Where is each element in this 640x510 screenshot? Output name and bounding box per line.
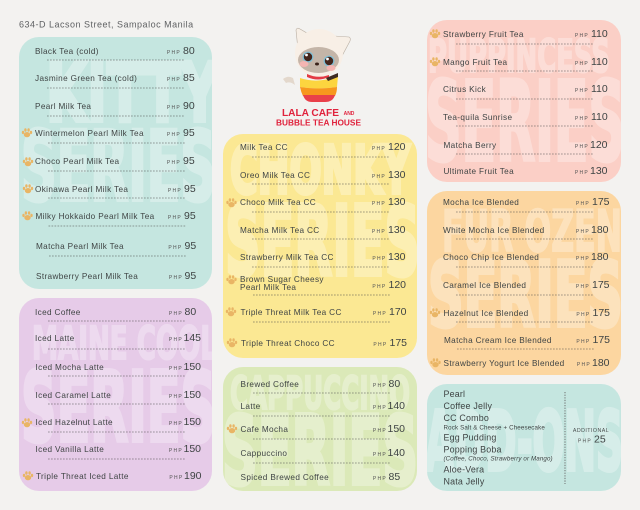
panel: Add-ons [425, 384, 623, 491]
item: Iced Mocha Latte [36, 361, 201, 376]
panel: Cappuccino Series [223, 367, 417, 491]
item: Milky Hokkaido Pearl Milk Tea: PHP [168, 215, 182, 221]
watermark: Kitty Series [24, 60, 212, 204]
logo wordmark: LALA CAFE [282, 108, 339, 119]
item: Wintermelon Pearl Milk Tea [22, 127, 195, 143]
item: Okinawa Pearl Milk Tea [23, 183, 196, 198]
item: Triple Threat Choco CC: Triple Threat Choco CC [241, 339, 335, 348]
item: Matcha Milk Tea CC: Matcha Milk Tea CC [240, 226, 320, 235]
item: Black Tea: Black Tea (cold) [35, 47, 99, 56]
item: Triple Threat Milk Tea CC [226, 306, 407, 322]
item: Tea-quila Sunrise: PHP [575, 116, 589, 122]
item: Milk Tea CC: 120 [388, 141, 406, 153]
icon: cat arm [283, 77, 295, 85]
item: Hazelnut Ice Blended: PHP [576, 312, 590, 318]
logo wordmark: BUBBLE TEA HOUSE [276, 118, 361, 128]
item: Matcha Cream Ice Blended: PHP [576, 339, 590, 345]
item: Iced Latte: PHP [169, 337, 183, 343]
add-ons list: Pearl [444, 389, 465, 399]
item: Triple Threat Milk Tea CC: Triple Threat Milk Tea CC [240, 308, 342, 317]
watermark: Kitty Series: SERIES [21, 111, 216, 223]
item: Spiced Brewed Coffee: Spiced Brewed Coffee [240, 473, 329, 482]
item: Triple Threat Milk Tea CC: 170 [389, 306, 407, 318]
item: Mocha Ice Blended: 175 [592, 196, 610, 208]
logo wordmark [276, 108, 361, 128]
item: Matcha Milk Tea CC: PHP [372, 229, 386, 235]
item: Strawberry Milk Tea CC: PHP [372, 256, 386, 262]
item: White Mocha Ice Blended: White Mocha Ice Blended [443, 226, 545, 235]
item: Iced Mocha Latte: Iced Mocha Latte [36, 363, 104, 372]
item: Choco Chip Ice Blended: Choco Chip Ice Blended [443, 253, 539, 262]
item: Pearl Milk Tea: PHP [167, 105, 181, 111]
watermark: Cappuccino Series: SERIES [222, 397, 418, 507]
item: Triple Threat Choco CC: 175 [390, 337, 407, 349]
additional price [573, 428, 609, 446]
item: Milky Hokkaido Pearl Milk Tea: Milky Hokkaido Pearl Milk Tea [36, 212, 155, 221]
item: Ultimate Fruit Tea: Ultimate Fruit Tea [444, 167, 514, 176]
additional price: ADDITIONAL [573, 428, 609, 434]
item: Triple Threat Iced Latte: PHP [169, 475, 184, 481]
item: Latte [240, 400, 405, 416]
item: Spiced Brewed Coffee: 85 [388, 471, 400, 483]
item: Black Tea [35, 45, 195, 60]
item: Iced Caramel Latte: Iced Caramel Latte [36, 391, 111, 400]
additional price: PHP [578, 438, 592, 444]
item: Iced Coffee: Iced Coffee [35, 308, 81, 317]
item: Iced Caramel Latte: PHP [169, 394, 183, 400]
item: Cafe Mocha: Cafe Mocha [240, 425, 288, 434]
item: Spiced Brewed Coffee: PHP [373, 476, 387, 482]
item: Milky Hokkaido Pearl Milk Tea: 95 [184, 210, 196, 222]
item: Oreo Milk Tea CC: 130 [388, 169, 406, 181]
item: Choco Milk Tea CC: Choco Milk Tea CC [240, 198, 316, 207]
item: Matcha Berry: 120 [590, 139, 608, 151]
item: Wintermelon Pearl Milk Tea: Wintermelon Pearl Milk Tea [35, 129, 144, 138]
item: Brewed Coffee [240, 378, 400, 393]
item: Iced Coffee: 80 [184, 306, 196, 318]
item: Ultimate Fruit Tea: PHP [575, 170, 589, 176]
item: Iced Hazelnut Latte [22, 416, 201, 432]
add-ons list: Rock Salt & Cheese + Cheesecake [444, 424, 545, 432]
item: Matcha Berry [444, 139, 608, 154]
item: Matcha Milk Tea CC: 130 [388, 224, 406, 236]
item: Iced Caramel Latte [36, 389, 201, 404]
watermark: Cappuccino Series: CAPPUCCINO [230, 367, 410, 420]
item: Hazelnut Ice Blended [430, 307, 610, 322]
item: White Mocha Ice Blended: PHP [576, 229, 590, 235]
item: Wintermelon Pearl Milk Tea: PHP [167, 132, 181, 138]
watermark: Chonky Series: CHONKY [230, 132, 411, 209]
item: Triple Threat Iced Latte [23, 470, 202, 482]
add-ons list: Aloe-Vera [444, 464, 484, 474]
item: Mocha Ice Blended: Mocha Ice Blended [443, 198, 519, 207]
item: Cappuccino [240, 447, 405, 463]
item: Choco Milk Tea CC: PHP [372, 201, 386, 207]
item: Cafe Mocha [227, 423, 405, 439]
item: Matcha Pearl Milk Tea: PHP [168, 245, 182, 251]
item: Brown Sugar Cheesy Pearl Milk Tea: 120 [388, 279, 406, 291]
item: Milk Tea CC: PHP [372, 146, 386, 152]
add-ons list: Nata Jelly [444, 476, 485, 486]
item: Iced Caramel Latte: 150 [184, 389, 201, 401]
item: Latte: Latte [240, 402, 261, 411]
item: Matcha Cream Ice Blended: Matcha Cream Ice Blended [444, 336, 552, 345]
item: Cappuccino: Cappuccino [240, 449, 287, 458]
logo: Lala Cafe cat mascot [276, 28, 361, 128]
item: Strawberry Pearl Milk Tea: 95 [184, 270, 196, 282]
watermark: Chonky Series: SERIES [225, 185, 420, 298]
item: Triple Threat Iced Latte: 190 [184, 470, 202, 482]
item: Matcha Milk Tea CC [240, 224, 406, 239]
item: Caramel Ice Blended [443, 279, 610, 295]
item: Caramel Ice Blended: 175 [592, 279, 610, 291]
item: Oreo Milk Tea CC [240, 169, 406, 184]
item: Matcha Pearl Milk Tea: Matcha Pearl Milk Tea [36, 242, 124, 251]
item: Cafe Mocha: PHP [373, 428, 387, 434]
item: Mango Fruit Tea: Mango Fruit Tea [443, 58, 507, 67]
item: Choco Pearl Milk Tea: Choco Pearl Milk Tea [35, 157, 119, 166]
item: Iced Latte: Iced Latte [35, 334, 75, 343]
item: Strawberry Pearl Milk Tea [36, 270, 196, 282]
panel: Kitty Series [19, 37, 220, 289]
panel: Fur-ozen Series [427, 191, 623, 375]
watermark: Maine Cool Series: MAINE COOL [32, 317, 217, 370]
divider [564, 392, 566, 484]
panel: Maine Cool Series [19, 298, 217, 491]
item: Cappuccino: 140 [388, 447, 405, 459]
item: Citrus Kick: 110 [591, 83, 608, 95]
item: Caramel Ice Blended: PHP [576, 284, 590, 290]
item: Brown Sugar Cheesy Pearl Milk Tea: Brown Sugar Cheesy [240, 275, 324, 284]
item: Iced Vanilla Latte: PHP [169, 448, 183, 454]
item: Mango Fruit Tea: PHP [575, 61, 589, 67]
watermark: Kitty Series: KITTY [46, 47, 220, 141]
item: Hazelnut Ice Blended: 175 [592, 307, 610, 319]
watermark: Maine Cool Series: SERIES [21, 351, 216, 464]
item: Brown Sugar Cheesy Pearl Milk Tea: PHP [372, 284, 386, 290]
add-ons list: Coffee Jelly [444, 401, 492, 411]
icon: bubble tea cup [300, 73, 338, 102]
item: Citrus Kick: Citrus Kick [443, 85, 487, 94]
item: Triple Threat Choco CC [227, 337, 407, 349]
item: Brewed Coffee: PHP [373, 383, 387, 389]
item: Spiced Brewed Coffee [240, 471, 400, 483]
item: Okinawa Pearl Milk Tea: 95 [184, 183, 196, 195]
item: Iced Latte [35, 332, 201, 349]
additional price: 25 [594, 434, 606, 446]
item: Iced Vanilla Latte [36, 443, 201, 459]
item: Brewed Coffee: 80 [388, 378, 400, 390]
item: Iced Vanilla Latte: 150 [184, 443, 201, 455]
item: Cafe Mocha: 150 [388, 423, 405, 435]
logo wordmark: AND [344, 111, 355, 117]
add-ons list: (Coffee, Choco, Strawberry or Mango) [444, 456, 553, 462]
item: Iced Mocha Latte: 150 [184, 361, 201, 373]
item: Strawberry Pearl Milk Tea: PHP [169, 275, 183, 281]
item: Brown Sugar Cheesy Pearl Milk Tea [226, 275, 406, 295]
item: Wintermelon Pearl Milk Tea: 95 [183, 127, 195, 139]
item: Brown Sugar Cheesy Pearl Milk Tea: Pearl Milk Tea [240, 283, 296, 292]
item: Matcha Berry: Matcha Berry [444, 141, 497, 150]
item: Iced Coffee: PHP [169, 311, 183, 317]
item: Oreo Milk Tea CC: Oreo Milk Tea CC [240, 171, 310, 180]
icon: cat head [295, 29, 343, 77]
item: Milk Tea CC [240, 141, 406, 157]
item: Strawberry Yogurt Ice Blended: PHP [577, 362, 591, 368]
item: Iced Latte: 145 [184, 332, 201, 344]
add-ons list: Popping Boba [444, 444, 502, 454]
watermark: Puppincess Series [428, 37, 621, 164]
item: Strawberry Milk Tea CC: 130 [388, 251, 406, 263]
item: Jasmine Green Tea [35, 72, 195, 88]
item: Iced Hazelnut Latte: Iced Hazelnut Latte [36, 418, 113, 427]
item: Strawberry Fruit Tea: 110 [591, 28, 608, 40]
item: Caramel Ice Blended: Caramel Ice Blended [443, 281, 526, 290]
item: Mango Fruit Tea: 110 [591, 56, 608, 68]
item: White Mocha Ice Blended [443, 224, 609, 239]
item: Jasmine Green Tea: 85 [183, 72, 195, 84]
item: Mocha Ice Blended [443, 196, 610, 212]
item: Choco Milk Tea CC: 130 [388, 196, 406, 208]
watermark: Cappuccino Series [224, 374, 416, 488]
item: Strawberry Milk Tea CC: Strawberry Milk Tea CC [240, 253, 334, 262]
item: Milk Tea CC: Milk Tea CC [240, 143, 288, 152]
item: White Mocha Ice Blended: 180 [591, 224, 609, 236]
item: Latte: PHP [373, 405, 387, 411]
item: Cappuccino: PHP [373, 452, 387, 458]
item: Hazelnut Ice Blended: Hazelnut Ice Blended [444, 309, 529, 318]
item: Strawberry Pearl Milk Tea: Strawberry Pearl Milk Tea [36, 272, 138, 281]
item: Choco Chip Ice Blended [443, 251, 609, 267]
add-ons list [444, 389, 553, 486]
item: Iced Coffee [35, 306, 196, 321]
item: Pearl Milk Tea [35, 100, 195, 116]
item: Tea-quila Sunrise: Tea-quila Sunrise [443, 113, 512, 122]
item: Black Tea: PHP [167, 50, 181, 56]
item: Ultimate Fruit Tea: 130 [590, 165, 608, 177]
item: Choco Pearl Milk Tea: 95 [183, 155, 195, 167]
item: Strawberry Fruit Tea [430, 28, 608, 44]
item: Choco Pearl Milk Tea [23, 155, 195, 171]
item: Latte: 140 [388, 400, 405, 412]
item: Jasmine Green Tea: Jasmine Green Tea (cold) [35, 74, 137, 83]
item: Strawberry Fruit Tea: Strawberry Fruit Tea [443, 30, 524, 39]
item: Strawberry Yogurt Ice Blended [430, 357, 610, 369]
address: 634-D Lacson Street, Sampaloc Manila [19, 20, 194, 30]
item: Oreo Milk Tea CC: PHP [372, 174, 386, 180]
item: Choco Milk Tea CC [226, 196, 406, 212]
watermark: Fur-ozen Series [430, 208, 620, 330]
item: Strawberry Fruit Tea: PHP [575, 33, 589, 39]
panel: Chonky Series [223, 132, 420, 358]
item: Matcha Pearl Milk Tea: 95 [184, 240, 196, 252]
add-ons list: Egg Pudding [444, 432, 497, 442]
icon: cat ears [296, 28, 350, 56]
item: Okinawa Pearl Milk Tea: PHP [168, 188, 182, 194]
item: Strawberry Yogurt Ice Blended: 180 [592, 357, 610, 369]
item: Okinawa Pearl Milk Tea: Okinawa Pearl Milk Tea [35, 185, 128, 194]
item: Iced Vanilla Latte: Iced Vanilla Latte [36, 445, 104, 454]
item: Iced Hazelnut Latte: PHP [169, 421, 183, 427]
item: Matcha Berry: PHP [575, 144, 589, 150]
item: Milky Hokkaido Pearl Milk Tea [22, 210, 196, 226]
add-ons list: CC Combo [444, 413, 489, 423]
item: Brewed Coffee: Brewed Coffee [240, 380, 299, 389]
item: Choco Chip Ice Blended: 180 [591, 251, 609, 263]
item: Ultimate Fruit Tea [444, 165, 608, 177]
item: Choco Chip Ice Blended: PHP [576, 256, 590, 262]
item: Mango Fruit Tea [430, 56, 608, 71]
item: Strawberry Milk Tea CC [240, 251, 406, 267]
item: Strawberry Yogurt Ice Blended: Strawberry Yogurt Ice Blended [444, 359, 565, 368]
item: Iced Mocha Latte: PHP [169, 366, 183, 372]
item: Jasmine Green Tea: PHP [167, 77, 181, 83]
item: Matcha Cream Ice Blended [444, 334, 610, 349]
item: Triple Threat Iced Latte: Triple Threat Iced Latte [36, 472, 129, 481]
item: Black Tea: 80 [183, 45, 195, 57]
item: Triple Threat Milk Tea CC: PHP [373, 311, 387, 317]
item: Matcha Cream Ice Blended: 175 [592, 334, 610, 346]
item: Triple Threat Choco CC: PHP [373, 342, 388, 348]
item: Iced Hazelnut Latte: 150 [184, 416, 201, 428]
item: Pearl Milk Tea: Pearl Milk Tea [35, 102, 91, 111]
item: Mocha Ice Blended: PHP [576, 201, 590, 207]
watermark: Maine Cool Series [24, 324, 212, 444]
item: Tea-quila Sunrise: 110 [591, 111, 608, 123]
item: Citrus Kick [443, 83, 608, 99]
item: Choco Pearl Milk Tea: PHP [167, 160, 181, 166]
panel: Purrincess Series [425, 20, 625, 186]
watermark: Chonky Series [228, 142, 417, 278]
item: Tea-quila Sunrise [443, 111, 608, 126]
item: Citrus Kick: PHP [575, 88, 589, 94]
item: Matcha Pearl Milk Tea [36, 240, 196, 256]
item: Pearl Milk Tea: 90 [183, 100, 195, 112]
